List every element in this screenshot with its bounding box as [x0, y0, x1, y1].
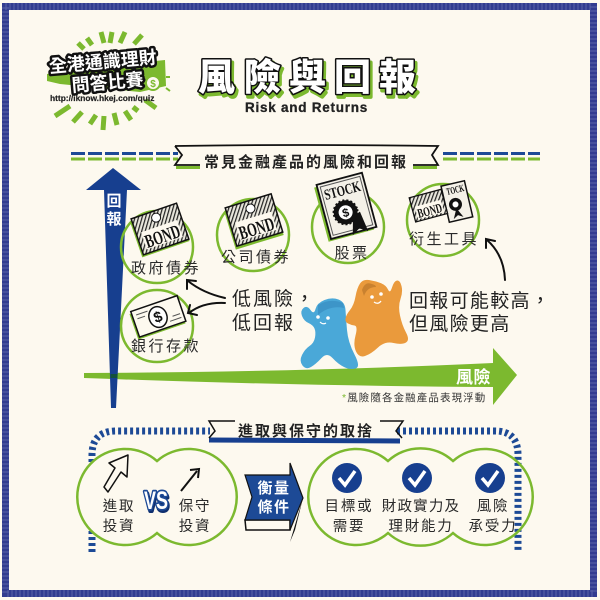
product: stock: 股票: [334, 245, 370, 262]
section 1 heading ribbon: 常見金融產品的風險和回報: [204, 153, 408, 171]
axis note: *風險隨各金融產品表現浮動: [342, 391, 486, 404]
title: 風險與回報: [200, 59, 418, 101]
label: goals or needs: [325, 498, 373, 535]
badge url: http://iknow.hkej.com/quiz: [50, 93, 154, 103]
axis label: risk: 風險: [456, 367, 491, 387]
arrow: criteria: [245, 463, 303, 542]
callout: higher return higher risk: 回報可能較高，: [409, 290, 551, 312]
product: stock: $: [341, 205, 351, 220]
label: goals or needs: 目標或: [325, 498, 373, 515]
product: bank deposit: 銀行存款: [131, 338, 201, 355]
panel: investment styles: [77, 449, 237, 545]
icon: check 2: [402, 463, 432, 493]
label: conservative investing: [179, 498, 211, 535]
product: derivatives: BOND: [416, 200, 444, 221]
title: 風險與回報: [198, 56, 416, 98]
product: stock: [312, 173, 384, 263]
label: financial strength: [382, 497, 460, 535]
callout line 2: 但風險更高: [409, 313, 511, 335]
arrow: to derivatives: [486, 239, 505, 280]
label: financial strength: 理財能力: [388, 518, 454, 535]
product: derivatives: TOCK: [445, 183, 466, 198]
badge rays: [47, 32, 170, 130]
badge: quiz logo: [47, 32, 170, 130]
arrow: criteria: 條件: [257, 499, 291, 516]
icon: check 3: [475, 463, 505, 493]
character: orange: [345, 280, 408, 356]
icon: small arrow: [181, 469, 199, 491]
arrows: low risk pointers: [187, 280, 225, 315]
axis label: return: 報: [106, 211, 122, 228]
character: blue: [301, 298, 358, 369]
product: corporate bond: BOND: [236, 214, 277, 244]
label: conservative investing: 投資: [179, 518, 211, 535]
icon: large outlined arrow: [104, 455, 128, 492]
badge title: 問答比賽: [71, 69, 144, 96]
label: risk tolerance: [469, 498, 517, 535]
section 2 heading ribbon: [209, 421, 403, 441]
label: aggressive investing: 進取: [103, 498, 135, 515]
axis crossing: [110, 374, 118, 378]
product: government bond: [121, 203, 201, 283]
section 2 dashed frame: [92, 431, 518, 552]
product: corporate bond: 公司債券: [221, 249, 291, 266]
subtitle: Risk and Returns: [245, 100, 368, 115]
label: risk tolerance: 承受力: [469, 518, 517, 535]
product: derivatives: 衍生工具: [409, 231, 479, 248]
dashed rules: [71, 154, 540, 159]
badge title: 全港通識理財: [48, 47, 157, 77]
label: financial strength: 財政實力及: [382, 497, 460, 515]
icon: check 1: [332, 463, 362, 493]
axis label: return: 回: [106, 193, 122, 210]
label: aggressive investing: 投資: [103, 518, 135, 535]
VS mark: VS: [144, 487, 168, 515]
product: bank deposit: [121, 290, 201, 362]
axis label: return: [106, 193, 122, 228]
panel: criteria: [308, 448, 533, 546]
icon: dollar coin: $: [150, 79, 156, 90]
product: derivatives: [407, 181, 479, 256]
blue return axis arrow: [86, 168, 141, 408]
label: aggressive investing: [103, 498, 135, 535]
product: corporate bond: [217, 194, 291, 271]
arrow: criteria: 衡量: [257, 479, 291, 497]
callout: low risk low return: 低風險，: [232, 288, 316, 310]
section 2 heading ribbon: 進取與保守的取捨: [238, 422, 374, 440]
callout line 2: 低回報: [232, 312, 295, 334]
label: conservative investing: 保守: [179, 498, 211, 515]
label: goals or needs: 需要: [333, 519, 365, 535]
label: risk tolerance: 風險: [477, 498, 509, 515]
VS mark: VS: [145, 489, 169, 517]
green risk axis arrow: [84, 348, 517, 405]
section 1 heading ribbon: [71, 145, 540, 171]
product: bank deposit: $: [151, 308, 165, 327]
product: government bond: BOND: [142, 221, 183, 253]
product: government bond: 政府債券: [131, 260, 201, 277]
badge title: [48, 47, 159, 98]
product: stock: STOCK: [323, 179, 363, 204]
